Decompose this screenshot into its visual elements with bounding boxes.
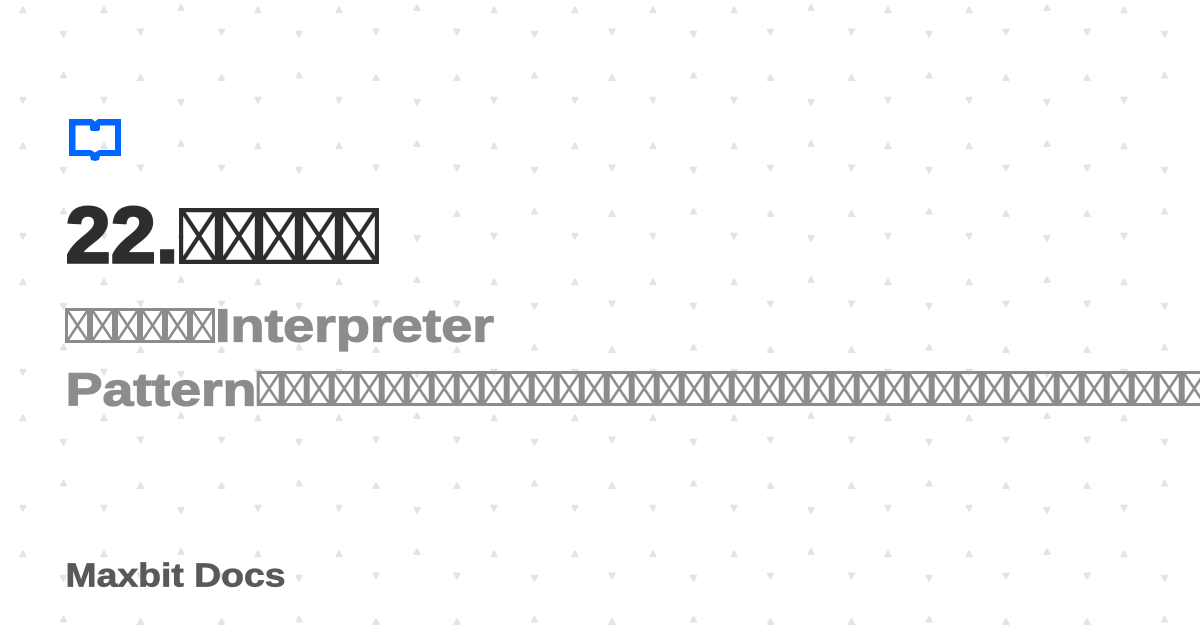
subtitle description: ）是一种行为型设计模式，它定义了一种语言的文法表示，并提供一个解释器来解释该 — [257, 379, 1200, 407]
title: 22. — [66, 191, 178, 280]
subtitle description: Interpreter — [215, 299, 494, 351]
title — [66, 191, 379, 280]
brand name: Maxbit Docs — [66, 556, 286, 594]
subtitle description: Pattern — [66, 363, 256, 415]
icon: open book — [69, 119, 121, 161]
subtitle description: 解释器模式（ — [65, 316, 215, 344]
subtitle description — [65, 299, 1200, 415]
title: 解释器模式 — [179, 221, 379, 265]
